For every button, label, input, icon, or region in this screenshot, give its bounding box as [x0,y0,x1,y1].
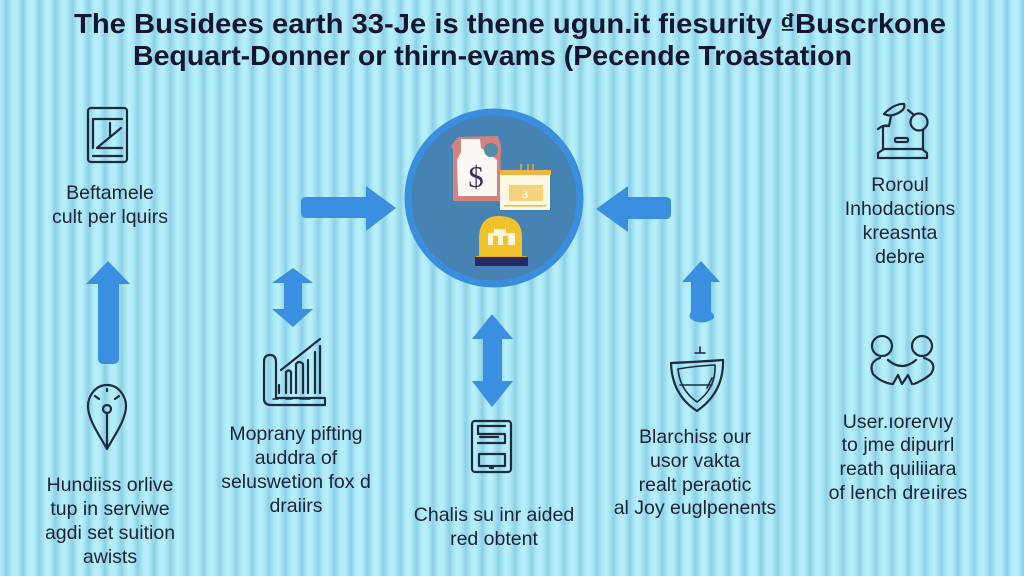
icon: two people handshake [872,336,933,384]
text: bottom left label: awists [83,546,137,568]
text: top left label: cult per lquirs [52,206,168,228]
icon: shield [671,347,723,411]
panel: chart [221,339,371,517]
icon: tablet [472,421,511,472]
text: bottom left label: agdi set suition [45,522,175,544]
text: top right label: Inhodactions [845,198,956,220]
text: bottom right label: to jme dipurrl [842,434,954,456]
arrow: left to hub [301,186,396,231]
text: top left label: Beftamele [66,182,154,204]
title [74,8,946,71]
text: top right label: debre [875,246,925,268]
text: shield label: usor vakta [650,450,740,472]
text: bottom right label: reath quiliiara [839,458,957,480]
title: The Busidees earth 33-Je is thene ugun.it fiesurity ₫Buscrkone [74,8,946,39]
arrow: up right [682,261,720,322]
arrow: up left column [86,261,130,364]
icon: money bag tag: $ [468,159,484,194]
text: shield label: Blarchisɛ our [639,426,751,448]
text: bottom center label: red obtent [450,528,538,550]
panel: shield [614,347,777,519]
arrow: double vertical left [272,268,313,327]
text: bottom left label: tup in serviwe [50,498,170,520]
icon: money bag tag [451,136,501,201]
arrow: right to hub [596,186,671,232]
icon: growth chart [264,339,325,405]
text: shield label: al Joy euglpenents [614,497,777,519]
panel: top right [845,104,956,268]
text: bottom left label: Hundiiss orlive [47,474,173,496]
central hub circle [408,112,580,284]
arrow: double vertical center [472,314,513,407]
panel: top left [52,108,168,228]
icon: yellow dome building [475,216,528,266]
text: bottom center label: Chalis su inr aided [414,504,574,526]
text: bottom right label: of lench dreıires [829,482,968,504]
icon: location pin [88,385,126,449]
icon: framed chart [88,108,127,162]
text: top right label: Roroul [871,174,929,196]
text: shield label: realt peraotic [639,474,752,496]
text: chart label: auddra of [255,447,338,469]
panel: bottom left [45,385,175,568]
icon: machine and tree [878,104,928,158]
text: top right label: kreasnta [863,222,938,244]
text: bottom right label: User.ıoreɾvıy [843,411,954,433]
text: chart label: draiirs [269,495,323,517]
panel: bottom center [414,421,574,550]
panel: bottom right [829,336,968,504]
text: chart label: Moprany pifting [229,423,363,445]
title: Bequart-Donner or thirn-evams (Pecende Troastation [133,40,852,71]
text: chart label: seluswetion fox d [221,471,371,493]
icon: calendar: 3 [522,189,528,201]
icon: calendar [500,164,551,210]
